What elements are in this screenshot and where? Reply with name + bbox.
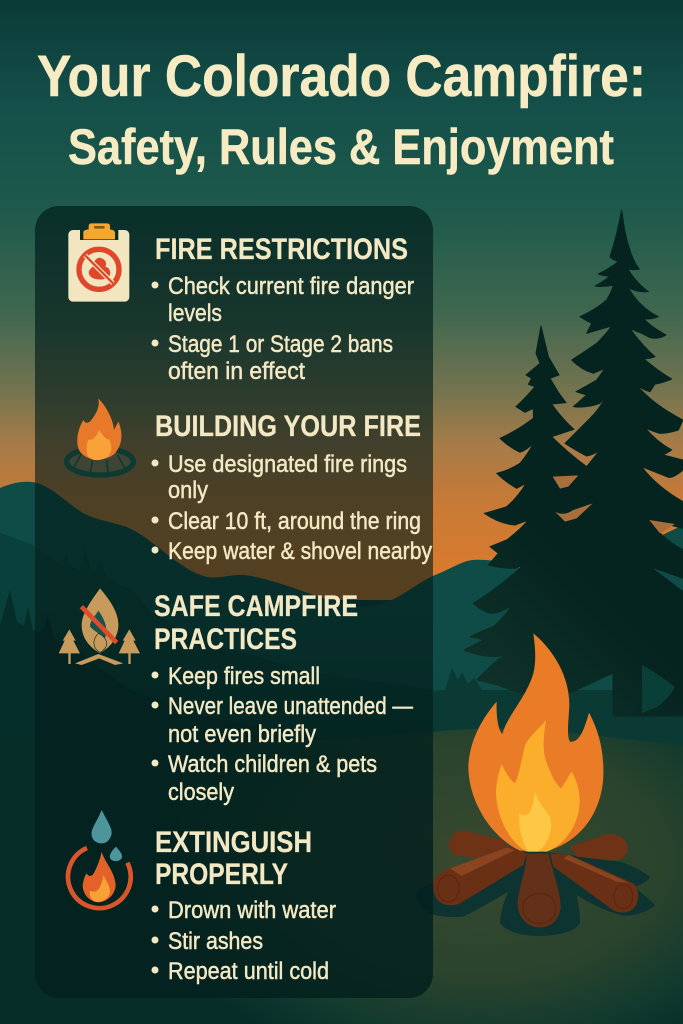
background: ground [0,729,683,1024]
log shadows [415,850,655,936]
bullet list: only [168,477,209,504]
heading [154,590,358,656]
bullet list: Stage 1 or Stage 2 bans [168,331,393,358]
bullet list: Clear 10 ft, around the ring [168,508,421,535]
bullet list: not even briefly [168,721,317,748]
background: dusk sky [0,0,683,600]
bullet list: closely [168,779,235,806]
title: Safety, Rules & Enjoyment [68,119,614,175]
logs [433,831,638,927]
bullet list: levels [168,300,222,327]
title [37,44,646,175]
section: extinguish properly [68,810,336,985]
heading [155,826,312,891]
bullet list: Stir ashes [168,928,263,955]
icon: crossed-out campfire with trees [59,588,140,665]
bullet list: often in effect [168,358,305,385]
pine trees [464,210,683,716]
bullet list: Keep water & shovel nearby [168,538,433,565]
bullet list: Keep fires small [168,663,320,690]
bullet list: Watch children & pets [168,751,377,778]
bullet list [152,451,433,565]
background: layered mountains [0,482,683,800]
icon: water drops over ringed flame [68,810,131,908]
bullet list [152,273,414,385]
bullet list: Use designated fire rings [168,451,407,478]
section: fire restrictions [68,223,414,385]
heading: PRACTICES [154,623,297,656]
heading: BUILDING YOUR FIRE [155,410,421,443]
icon: flame in fire ring [67,398,133,475]
bullet list: Check current fire danger [168,273,414,300]
bullet list [152,663,413,806]
flame [468,633,603,852]
heading: FIRE RESTRICTIONS [155,233,408,266]
bullet list: Repeat until cold [168,958,329,985]
section: building your fire [67,398,433,565]
heading: PROPERLY [155,858,288,891]
bullet list: Never leave unattended — [168,693,413,720]
campfire illustration [415,633,655,936]
bullet list [152,897,336,985]
heading: SAFE CAMPFIRE [154,590,358,623]
icon: clipboard with no-fire sign [68,223,129,302]
heading: EXTINGUISH [155,826,312,859]
panel: campfire guide [35,206,433,998]
bullet list: Drown with water [168,897,336,924]
section: safe campfire practices [59,588,413,806]
